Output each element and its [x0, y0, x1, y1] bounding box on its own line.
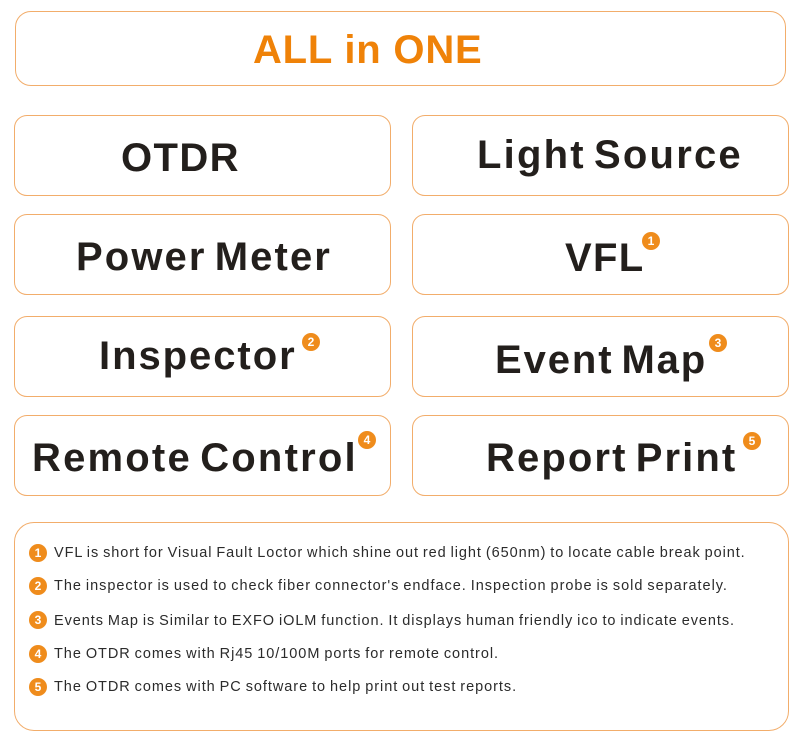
- note 1: VFL is short for Visual Fault Loctor which shine out red light (650nm) to locate cable break point.: [54, 545, 746, 561]
- panel: Event Map: [412, 316, 789, 397]
- panel: Inspector: [14, 316, 391, 397]
- note 2: 2: [35, 579, 41, 593]
- panel: Inspector: Inspector: [99, 334, 297, 378]
- panel: footnotes: [14, 522, 789, 731]
- note 4: 4: [35, 647, 41, 661]
- panel: Remote Control: 4: [364, 433, 370, 447]
- panel: Report Print: 5: [749, 434, 755, 448]
- note 5: The OTDR comes with PC software to help print out test reports.: [54, 679, 517, 695]
- panel: Report Print: [412, 415, 789, 496]
- title: ALL in ONE: [253, 28, 482, 72]
- panel: Power Meter: Power Meter: [76, 235, 332, 279]
- note 3: 3: [35, 613, 41, 627]
- note 3: Events Map is Similar to EXFO iOLM function. It displays human friendly ico to indicate events.: [54, 613, 735, 629]
- panel: VFL: VFL: [565, 236, 644, 280]
- panel: VFL: 1: [648, 234, 654, 248]
- panel: Power Meter: [14, 214, 391, 295]
- panel: VFL: [412, 214, 789, 295]
- panel: Remote Control: Remote Control: [32, 436, 358, 480]
- panel: OTDR: [14, 115, 391, 196]
- panel: Light Source: [412, 115, 789, 196]
- panel: Inspector: 2: [308, 335, 314, 349]
- panel: Report Print: Report Print: [486, 436, 737, 480]
- panel: Event Map: 3: [715, 336, 721, 350]
- panel: Remote Control: [14, 415, 391, 496]
- note 2: The inspector is used to check fiber connector's endface. Inspection probe is sold separately.: [54, 578, 728, 594]
- note 5: 5: [35, 680, 41, 694]
- panel: Event Map: Event Map: [495, 338, 707, 382]
- title panel: [15, 11, 786, 86]
- note 1: 1: [35, 546, 41, 560]
- note 4: The OTDR comes with Rj45 10/100M ports for remote control.: [54, 646, 499, 662]
- panel: Light Source: Light Source: [477, 133, 743, 177]
- panel: OTDR: OTDR: [121, 136, 240, 180]
